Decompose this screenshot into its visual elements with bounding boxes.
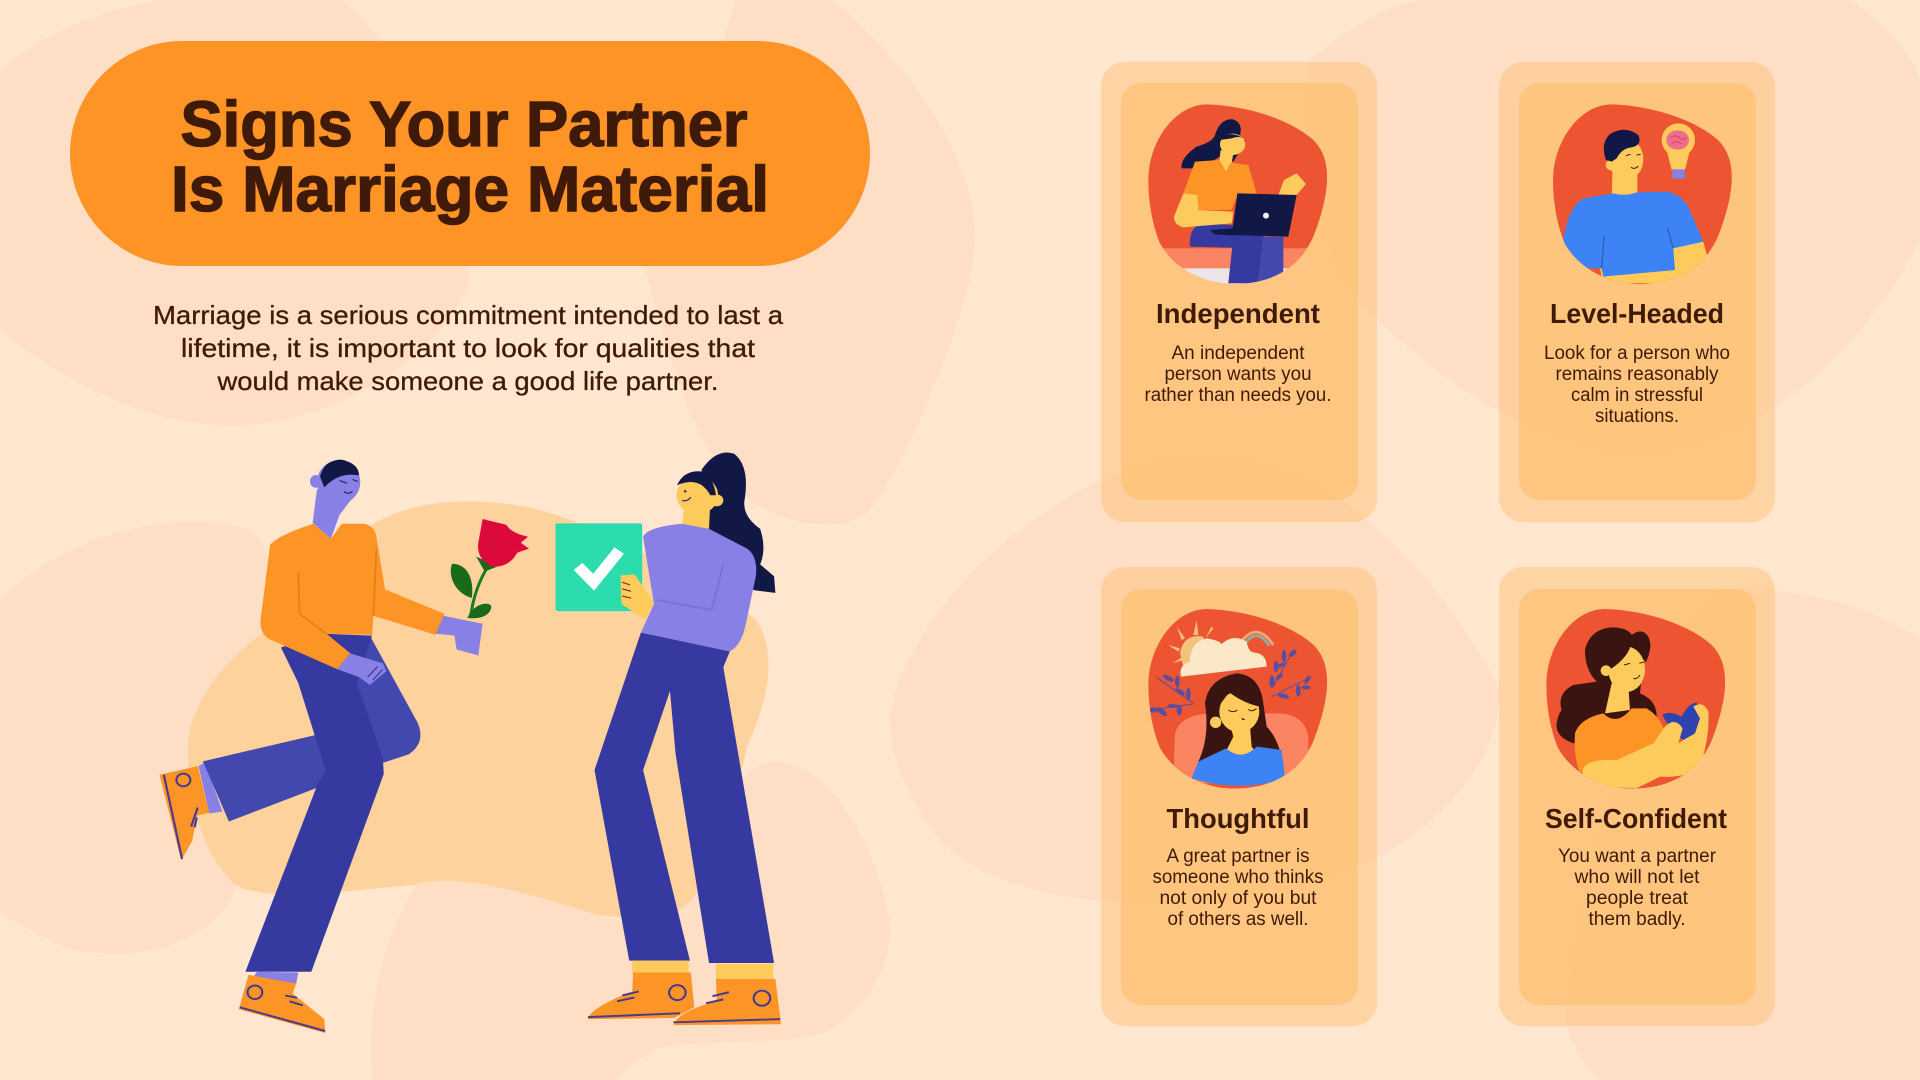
decorative blob behind couple — [188, 501, 768, 919]
card: Level-Headed — [1499, 62, 1775, 522]
title: Signs Your Partner — [180, 88, 748, 160]
icon: woman holding heart — [1541, 605, 1731, 791]
description: who will not let — [1573, 867, 1700, 888]
man — [160, 460, 483, 1033]
title — [171, 88, 769, 225]
intro paragraph: would make someone a good life partner. — [216, 366, 718, 396]
description: A great partner is — [1166, 846, 1310, 867]
description: person wants you — [1164, 364, 1312, 385]
description — [1558, 846, 1717, 930]
title: Is Marriage Material — [171, 153, 769, 225]
heading: Independent — [1156, 298, 1320, 329]
description: calm in stressful — [1571, 385, 1703, 406]
intro paragraph: Marriage is a serious commitment intended to last a — [153, 300, 784, 330]
clipboard with check — [555, 523, 642, 611]
description: Look for a person who — [1544, 343, 1730, 364]
description: someone who thinks — [1152, 867, 1324, 888]
card: Independent — [1101, 62, 1377, 522]
heading: Level-Headed — [1550, 298, 1724, 329]
lower background blob — [371, 762, 891, 1080]
description: people treat — [1586, 888, 1689, 909]
description: not only of you but — [1160, 888, 1317, 909]
description: You want a partner — [1558, 846, 1717, 867]
description: situations. — [1595, 406, 1679, 427]
card: Self-Confident — [1499, 567, 1775, 1026]
intro paragraph: lifetime, it is important to look for qualities that — [181, 333, 756, 363]
intro paragraph — [153, 300, 784, 396]
woman — [588, 452, 781, 1025]
description: remains reasonably — [1556, 364, 1719, 385]
icon: woman daydreaming — [1143, 605, 1333, 791]
description — [1152, 846, 1324, 930]
description: them badly. — [1588, 909, 1686, 930]
heading: Self-Confident — [1545, 803, 1727, 834]
icon: man with lightbulb idea — [1548, 100, 1738, 287]
description — [1144, 343, 1332, 406]
title pill — [70, 41, 870, 266]
illustration: couple — [160, 452, 781, 1033]
rose — [451, 519, 529, 618]
description: of others as well. — [1168, 909, 1308, 930]
heading: Thoughtful — [1166, 803, 1310, 834]
description — [1544, 343, 1730, 427]
icon: woman with laptop — [1143, 100, 1333, 288]
description: An independent — [1172, 343, 1305, 364]
description: rather than needs you. — [1144, 385, 1332, 406]
card: Thoughtful — [1101, 567, 1377, 1026]
